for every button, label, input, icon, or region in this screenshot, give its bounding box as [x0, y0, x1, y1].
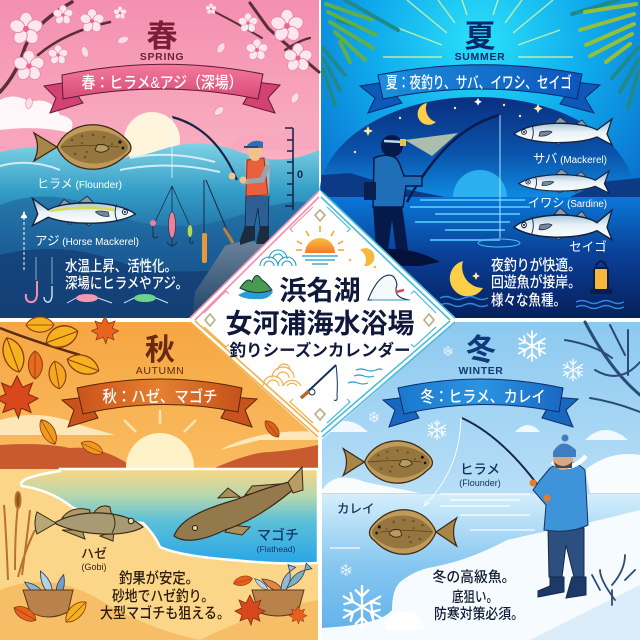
rod: winter	[462, 418, 555, 510]
label: flathead: マゴチ	[257, 527, 299, 543]
label: seigo: セイゴ	[569, 239, 607, 254]
label: mackerel: サバ (Mackerel)	[533, 152, 607, 166]
arrow: depth	[21, 212, 27, 270]
autumn branch and leaves	[0, 316, 283, 458]
depth scale: 0	[297, 169, 303, 181]
center diamond	[187, 190, 457, 441]
text: summer note: 夜釣りが快適。	[491, 256, 581, 274]
ribbon: autumn	[62, 379, 257, 427]
panel: spring	[0, 0, 319, 318]
title	[226, 276, 414, 360]
fish: sardine	[519, 169, 609, 193]
text: winter note: 底狙い。	[452, 589, 498, 606]
label: horse mackerel: アジ (Horse Mackerel)	[35, 234, 139, 248]
heading: autumn	[136, 334, 184, 377]
angler: summer	[364, 135, 440, 266]
ribbon: spring: 春：ヒラメ&アジ（深場）	[82, 74, 242, 92]
text: autumn note: 砂地でハゼ釣り。	[112, 588, 214, 605]
fish: gobi	[35, 506, 143, 541]
label: sardine: イワシ (Sardine)	[528, 196, 607, 210]
text: spring note	[65, 258, 188, 292]
ribbon: autumn: 秋：ハゼ、マゴチ	[102, 387, 218, 406]
heading: winter: 冬	[466, 334, 496, 367]
label: karei: カレイ	[337, 502, 375, 516]
icon: small waves	[348, 369, 382, 384]
sun: autumn	[126, 433, 194, 501]
branches	[0, 2, 319, 92]
angler: spring	[228, 141, 270, 245]
heading: summer: 夏	[464, 19, 496, 54]
panel: summer	[319, 0, 640, 318]
ribbon: winter	[383, 379, 578, 427]
rod and rig	[150, 117, 237, 263]
icon: basket right	[252, 563, 312, 616]
text: autumn note: 釣果が安定。	[119, 569, 199, 587]
text: winter note: 冬の高級魚。	[432, 568, 516, 586]
heading: autumn: AUTUMN	[136, 365, 184, 377]
text: spring note: 水温上昇、活性化。	[65, 258, 177, 275]
text: spring note: 深場にヒラメやアジ。	[65, 275, 188, 292]
heading: spring: SPRING	[140, 51, 184, 63]
heading: summer: SUMMER	[455, 51, 505, 63]
text: winter note: 防寒対策必須。	[434, 606, 524, 623]
heading: summer	[455, 19, 505, 63]
snowflakes	[341, 331, 583, 628]
ribbon: summer: 夏：夜釣り、サバ、イワシ、セイゴ	[386, 73, 572, 92]
heading: autumn: 秋	[145, 334, 175, 367]
text: autumn note: 大型マゴチも狙える。	[100, 604, 230, 622]
rod and line: summer	[407, 115, 520, 247]
icon: moon and waves	[440, 261, 488, 306]
ribbon: summer	[360, 65, 600, 113]
heading: spring	[140, 19, 184, 63]
depth scale	[285, 128, 303, 210]
fish: flathead	[174, 467, 303, 540]
line and arrow	[424, 418, 461, 506]
label: winter flounder: ヒラメ	[460, 462, 500, 477]
icon: fishing rod	[301, 365, 337, 400]
panel: winter	[322, 322, 640, 640]
text: autumn note	[100, 569, 230, 622]
panel: autumn	[0, 316, 318, 640]
headlamp beam	[405, 133, 458, 156]
label: flounder: ヒラメ (Flounder)	[37, 177, 122, 191]
diamond ornaments	[205, 210, 434, 420]
text: summer note	[491, 256, 581, 309]
icon: lantern	[576, 261, 624, 308]
label: winter flounder	[459, 462, 501, 488]
leaves on sand	[11, 574, 307, 626]
icon: basket left	[22, 569, 73, 617]
fish: flounder	[34, 125, 131, 169]
text: winter note	[432, 568, 524, 623]
icon: island	[238, 275, 273, 299]
stars	[354, 98, 542, 153]
fish: horse mackerel	[33, 196, 135, 226]
reeds	[4, 492, 35, 580]
text: summer note: 様々な魚種。	[491, 291, 566, 309]
palms	[323, 0, 638, 108]
heading: winter: WINTER	[458, 365, 504, 377]
label: flathead	[257, 527, 299, 554]
night dome	[319, 97, 635, 297]
heading: winter	[458, 334, 504, 377]
bare tree	[565, 322, 640, 605]
title: 釣りシーズンカレンダー	[230, 340, 410, 360]
label: gobi	[81, 546, 107, 572]
title: 浜名湖	[280, 276, 360, 306]
fish: mackerel	[514, 117, 612, 145]
fish: winter flounder	[343, 441, 432, 483]
ribbon: spring	[44, 64, 280, 113]
icon: moon and stars	[349, 248, 376, 268]
fish: karei	[369, 510, 457, 554]
label: gobi: (Gobi)	[81, 562, 107, 572]
diamond border	[190, 192, 455, 437]
title: 女河浦海水浴場	[226, 309, 414, 339]
sea: autumn	[21, 469, 318, 564]
heading: spring: 春	[146, 19, 178, 54]
snow ground	[322, 510, 640, 640]
icon: wave and float	[368, 275, 410, 300]
icon: seigaiha waves bottom	[263, 364, 301, 386]
sun rays	[383, 0, 573, 57]
label: winter flounder: (Flounder)	[459, 478, 501, 488]
ribbon: winter: 冬：ヒラメ、カレイ	[420, 388, 546, 406]
cherry blossoms	[8, 3, 314, 117]
text: summer note: 回遊魚が接岸。	[491, 273, 581, 291]
rock	[192, 241, 285, 318]
angler: winter	[530, 434, 588, 598]
label: gobi: ハゼ	[81, 546, 107, 561]
icons: lures	[67, 294, 168, 303]
icon: crescent moon	[418, 103, 436, 125]
icon: seigaiha waves top	[260, 250, 296, 266]
icon: rising sun	[296, 226, 344, 264]
label: flathead: (Flathead)	[257, 544, 296, 554]
fish: seigo	[514, 208, 612, 240]
icons: hooks	[26, 257, 52, 302]
